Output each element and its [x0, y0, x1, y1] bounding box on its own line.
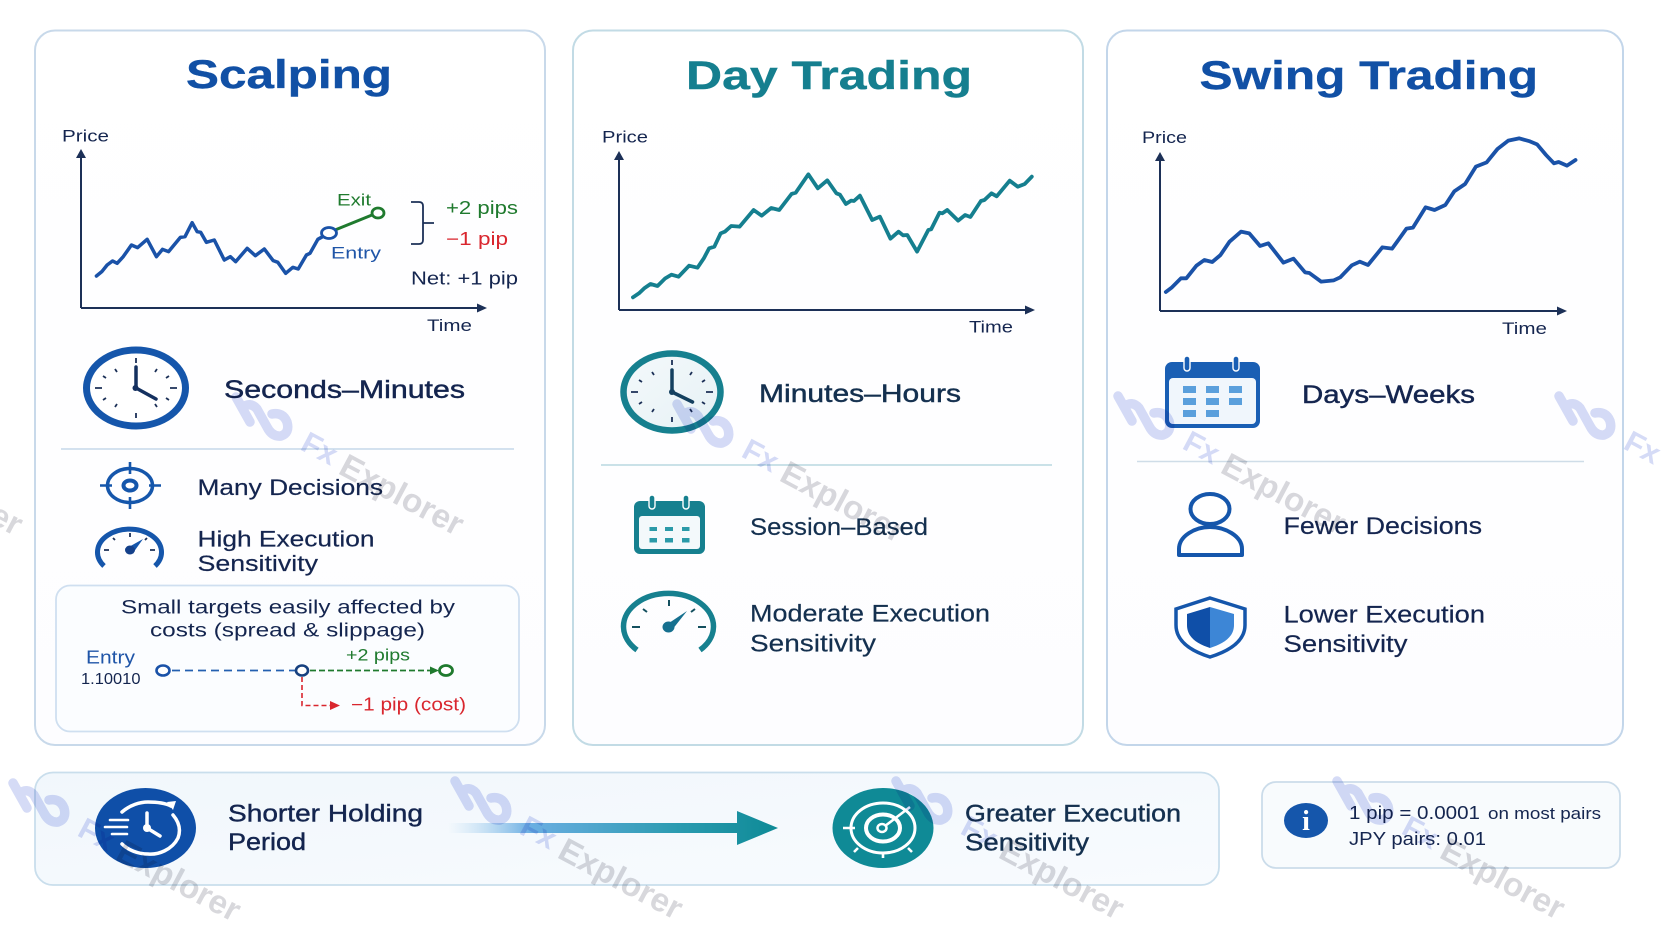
chart: swing trading price line: Time	[1502, 319, 1547, 338]
watermarks: Fx Explorer: Explorer	[994, 831, 1130, 927]
text: pip values: 1 pip = 0.0001	[1349, 802, 1480, 823]
icon: teal clock	[624, 354, 720, 430]
callout: small targets and costs: 1.10010	[81, 671, 141, 688]
icon: shield	[1176, 598, 1245, 657]
icon: blue calendar	[1165, 356, 1260, 428]
chart: scalping price line: Exit	[337, 190, 371, 210]
chart: scalping price line: Price	[62, 126, 109, 146]
label: Greater Execution Sensitivity: Sensitivity	[965, 830, 1089, 856]
chart: swing trading price line	[1142, 128, 1576, 338]
icon: crosshair target	[100, 462, 161, 509]
icon: teal gauge	[624, 593, 714, 650]
watermarks: Fx Explorer: Fx	[737, 433, 784, 479]
icon: fast clock badge	[95, 788, 196, 868]
label: Seconds–Minutes: Seconds–Minutes	[224, 376, 465, 404]
watermarks: Fx Explorer: Fx	[515, 810, 562, 856]
label: Shorter Holding Period: Shorter Holding	[228, 800, 423, 828]
watermarks: Fx Explorer: Explorer	[553, 831, 689, 927]
callout: small targets and costs: Small targets easily affected by	[121, 598, 456, 618]
label: Lower Execution Sensitivity: Sensitivity	[1284, 631, 1408, 658]
chart: swing trading price line: Price	[1142, 128, 1187, 147]
watermarks: Fx Explorer: Explorer	[775, 454, 911, 550]
label: Greater Execution Sensitivity: Greater Execution	[965, 800, 1181, 828]
callout: small targets and costs: −1 pip (cost)	[351, 694, 466, 714]
text: pip values: JPY pairs: 0.01	[1349, 828, 1486, 849]
heading: Scalping: Scalping	[186, 53, 392, 97]
panel: Swing Trading	[1107, 30, 1623, 745]
watermarks: Fx Explorer: Fx	[296, 426, 343, 472]
watermarks: Fx Explorer: Fx	[1178, 425, 1225, 471]
watermarks: Fx Explorer: Fx	[1397, 810, 1444, 856]
panel: Scalping	[35, 30, 545, 745]
label: Lower Execution Sensitivity: Lower Execution	[1284, 602, 1485, 628]
text: pip values	[1349, 802, 1601, 849]
label: Shorter Holding Period	[228, 800, 423, 856]
heading: Day Trading: Day Trading	[686, 54, 972, 98]
label: High Execution Sensitivity: High Execution	[198, 526, 374, 552]
watermarks: Fx Explorer: Fx	[73, 812, 120, 858]
label: Minutes–Hours: Minutes–Hours	[759, 380, 961, 408]
label: High Execution Sensitivity	[198, 526, 374, 576]
chart: scalping price line: +2 pips	[446, 198, 518, 218]
text: pip values: on most pairs	[1488, 804, 1601, 823]
panel: Day Trading	[573, 30, 1083, 745]
watermarks: Fx Explorer: Explorer	[334, 447, 470, 543]
callout: small targets and costs: costs (spread & slippage)	[150, 620, 425, 642]
label: Many Decisions: Many Decisions	[198, 475, 383, 500]
watermarks: Fx Explorer: Fx	[956, 810, 1003, 856]
label: Moderate Execution Sensitivity	[750, 600, 990, 658]
watermarks: Fx Explorer: Explorer	[111, 833, 247, 928]
chart: day trading price line	[602, 128, 1035, 336]
label: Fewer Decisions: Fewer Decisions	[1284, 513, 1482, 540]
callout: pip definition	[1262, 782, 1620, 868]
panel: holding period to execution sensitivity strip	[35, 772, 1219, 885]
chart: scalping price line	[62, 126, 518, 335]
icon: target badge	[832, 788, 934, 868]
icon: person	[1179, 494, 1242, 555]
icon: info: i	[1302, 806, 1310, 837]
label: Shorter Holding Period: Period	[228, 829, 306, 856]
watermarks: Fx Explorer: Fx	[1619, 425, 1664, 471]
label: Lower Execution Sensitivity	[1284, 602, 1485, 658]
icon: info	[1284, 803, 1328, 838]
watermarks: Fx Explorer	[0, 396, 1664, 928]
chart: scalping price line: Net: +1 pip	[411, 268, 518, 288]
icon: gauge	[98, 529, 162, 566]
label: Session–Based: Session–Based	[750, 514, 928, 541]
chart: scalping price line: −1 pip	[446, 229, 508, 249]
label: Moderate Execution Sensitivity: Sensitivity	[750, 630, 876, 658]
chart: scalping price line: Entry	[331, 244, 382, 262]
heading: Swing Trading: Swing Trading	[1200, 54, 1538, 98]
chart: scalping price line: Time	[427, 316, 472, 335]
icon: clock	[86, 350, 186, 426]
label: Days–Weeks: Days–Weeks	[1302, 381, 1475, 409]
callout: small targets and costs	[56, 586, 519, 732]
chart: day trading price line: Price	[602, 128, 648, 146]
arrow: gradient right arrow	[448, 811, 778, 845]
chart: day trading price line: Time	[969, 318, 1013, 336]
label: High Execution Sensitivity: Sensitivity	[198, 551, 318, 576]
watermarks: Fx Explorer: Explorer	[1435, 831, 1571, 927]
callout: small targets and costs: Entry	[86, 648, 135, 668]
label: Greater Execution Sensitivity	[965, 800, 1181, 856]
callout: small targets and costs: +2 pips	[346, 646, 410, 664]
icon: teal calendar	[634, 495, 705, 554]
watermarks: Fx Explorer: Explorer	[1216, 446, 1352, 542]
label: Moderate Execution Sensitivity: Moderate Execution	[750, 600, 990, 628]
